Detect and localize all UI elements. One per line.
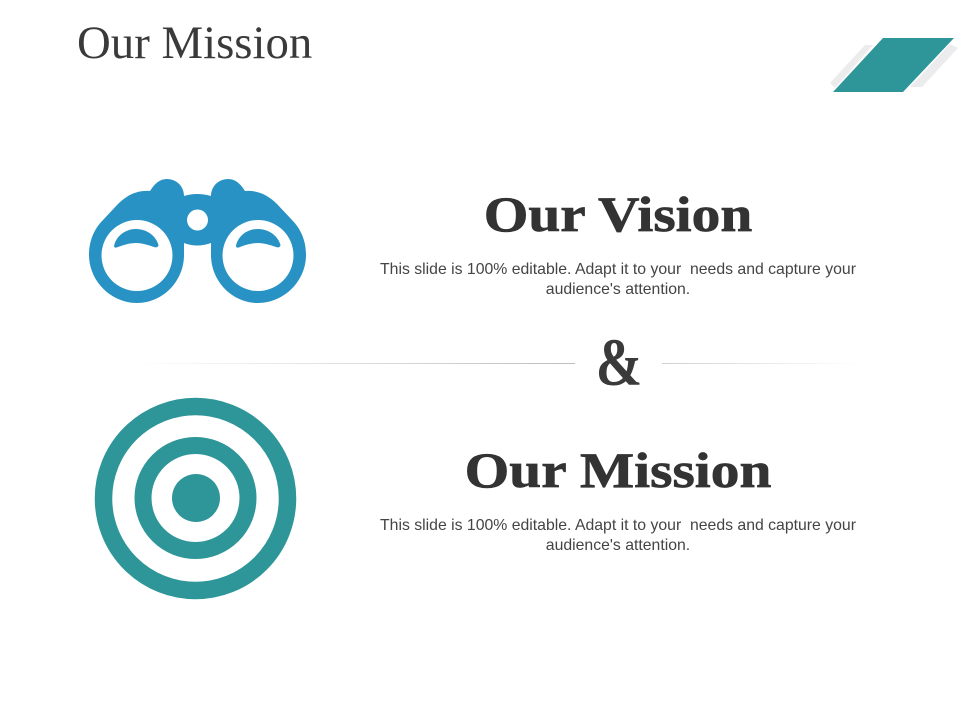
heading: our mission: Our Mission xyxy=(465,442,771,498)
icon: target xyxy=(94,398,296,600)
text: vision description xyxy=(380,260,856,298)
text: mission description: audience's attention. xyxy=(546,536,690,554)
icon: decorative parallelogram xyxy=(830,38,958,92)
text: vision description: audience's attention. xyxy=(546,280,690,298)
text: mission description xyxy=(380,516,856,554)
text: vision description: This slide is 100% editable. Adapt it to your needs and capture your xyxy=(380,260,856,278)
text: mission description: This slide is 100% editable. Adapt it to your needs and capture your xyxy=(380,516,856,534)
title: Our Mission xyxy=(77,16,312,68)
divider with ampersand: & xyxy=(596,324,642,400)
icon: binoculars xyxy=(89,179,306,303)
heading: our vision: Our Vision xyxy=(484,186,752,242)
